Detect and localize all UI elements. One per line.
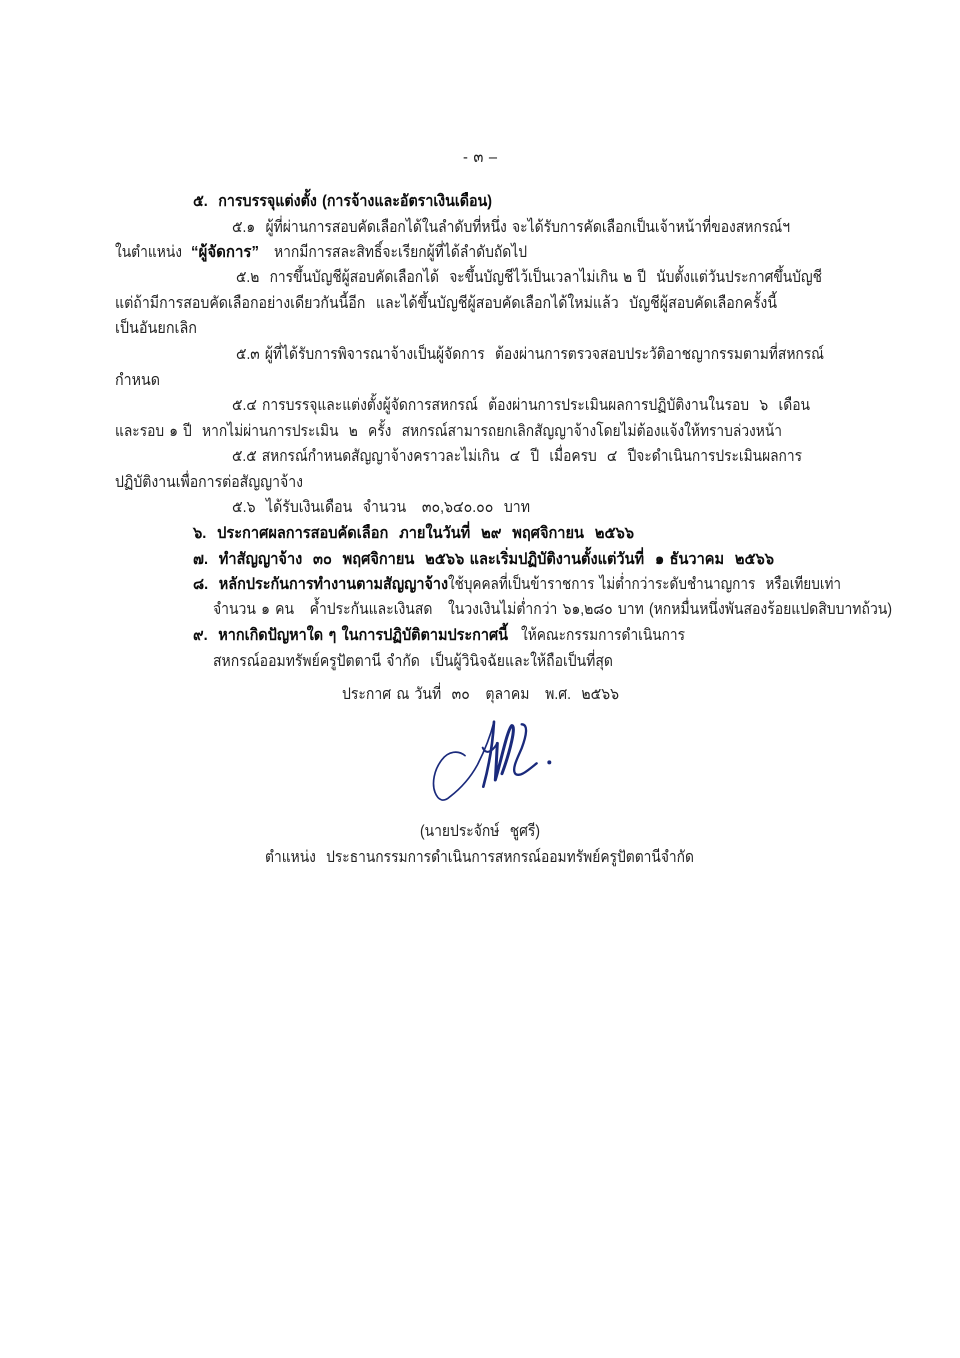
clause 5.1: ในตำแหน่ง: [115, 242, 182, 261]
clause 5.6 salary: ๕.๖ ได้รับเงินเดือน จำนวน ๓๐,๖๔๐.๐๐ บาท: [232, 497, 530, 516]
clause 5.1: “ผู้จัดการ”: [191, 243, 259, 263]
signatory name: (นายประจักษ์ ชูศรี): [420, 821, 540, 841]
clause 5.2: แต่ถ้ามีการสอบคัดเลือกอย่างเดียวกันนี้อีก และได้ขึ้นบัญชีผู้สอบคัดเลือกได้ใหม่แล้ว บัญชีผู้สอบคัดเลือกครั้งนี้: [115, 291, 777, 313]
section 9: [193, 622, 685, 671]
clause 5.4: [115, 393, 810, 440]
section 5 heading: ๕. การบรรจุแต่งตั้ง (การจ้างและอัตราเงินเดือน): [193, 188, 492, 211]
section 7: ๗. ทำสัญญาจ้าง ๓๐ พฤศจิกายน ๒๕๖๖ และเริ่มปฏิบัติงานตั้งแต่วันที่ ๑ ธันวาคม ๒๕๖๖: [193, 546, 774, 569]
signatory position: ตำแหน่ง ประธานกรรมการดำเนินการสหกรณ์ออมทรัพย์ครูปัตตานีจำกัด: [265, 847, 694, 867]
clause 5.3: กำหนด: [115, 372, 160, 389]
clause 5.5: ๕.๕ สหกรณ์กำหนดสัญญาจ้างคราวละไม่เกิน ๔ ปี เมื่อครบ ๔ ปีจะดำเนินการประเมินผลการ: [232, 444, 802, 465]
clause 5.5: ปฏิบัติงานเพื่อการต่อสัญญาจ้าง: [115, 470, 303, 491]
clause 5.1: ๕.๑ ผู้ที่ผ่านการสอบคัดเลือกได้ในลำดับที่หนึ่ง จะได้รับการคัดเลือกเป็นเจ้าหน้าที่ของสหกรณ์ฯ: [232, 215, 790, 237]
clause 5.5: [115, 444, 802, 491]
clause 5.1: หากมีการสละสิทธิ์จะเรียกผู้ที่ได้ลำดับถัดไป: [274, 240, 527, 262]
clause 5.2: [115, 265, 822, 337]
clause 5.3: [115, 342, 824, 389]
section 6: ๖. ประกาศผลการสอบคัดเลือก ภายในวันที่ ๒๙ พฤศจิกายน ๒๕๖๖: [192, 521, 634, 542]
section 8: ๘. หลักประกันการทำงานตามสัญญาจ้าง: [193, 575, 448, 594]
signature: [434, 722, 551, 800]
announcement date: ประกาศ ณ วันที่ ๓๐ ตุลาคม พ.ศ. ๒๕๖๖: [342, 682, 619, 704]
clause 5.4: และรอบ ๑ ปี หากไม่ผ่านการประเมิน ๒ ครั้ง สหกรณ์สามารถยกเลิกสัญญาจ้างโดยไม่ต้องแจ้งให้ทราบล่วงหน้า: [115, 419, 782, 440]
section 9: สหกรณ์ออมทรัพย์ครูปัตตานี จำกัด เป็นผู้วินิจฉัยและให้ถือเป็นที่สุด: [213, 649, 613, 671]
section 9: ให้คณะกรรมการดำเนินการ: [521, 625, 685, 644]
section 8: ใช้บุคคลที่เป็นข้าราชการ ไม่ต่ำกว่าระดับชำนาญการ หรือเทียบเท่า: [448, 572, 841, 594]
clause 5.2: เป็นอันยกเลิก: [115, 317, 197, 337]
clause 5.4: ๕.๔ การบรรจุและแต่งตั้งผู้จัดการสหกรณ์ ต้องผ่านการประเมินผลการปฏิบัติงานในรอบ ๖ เดือน: [232, 393, 810, 415]
section 8: [193, 572, 892, 618]
page number: - ๓ –: [463, 149, 497, 166]
clause 5.1: [115, 215, 790, 263]
clause 5.3: ๕.๓ ผู้ที่ได้รับการพิจารณาจ้างเป็นผู้จัดการ ต้องผ่านการตรวจสอบประวัติอาชญากรรมตามที่สหกรณ์: [236, 342, 824, 364]
section 9: ๙. หากเกิดปัญหาใด ๆ ในการปฏิบัติตามประกาศนี้: [193, 622, 508, 645]
clause 5.2: ๕.๒ การขึ้นบัญชีผู้สอบคัดเลือกได้ จะขึ้นบัญชีไว้เป็นเวลาไม่เกิน ๒ ปี นับตั้งแต่วันประกาศขึ้นบัญชี: [236, 265, 822, 287]
